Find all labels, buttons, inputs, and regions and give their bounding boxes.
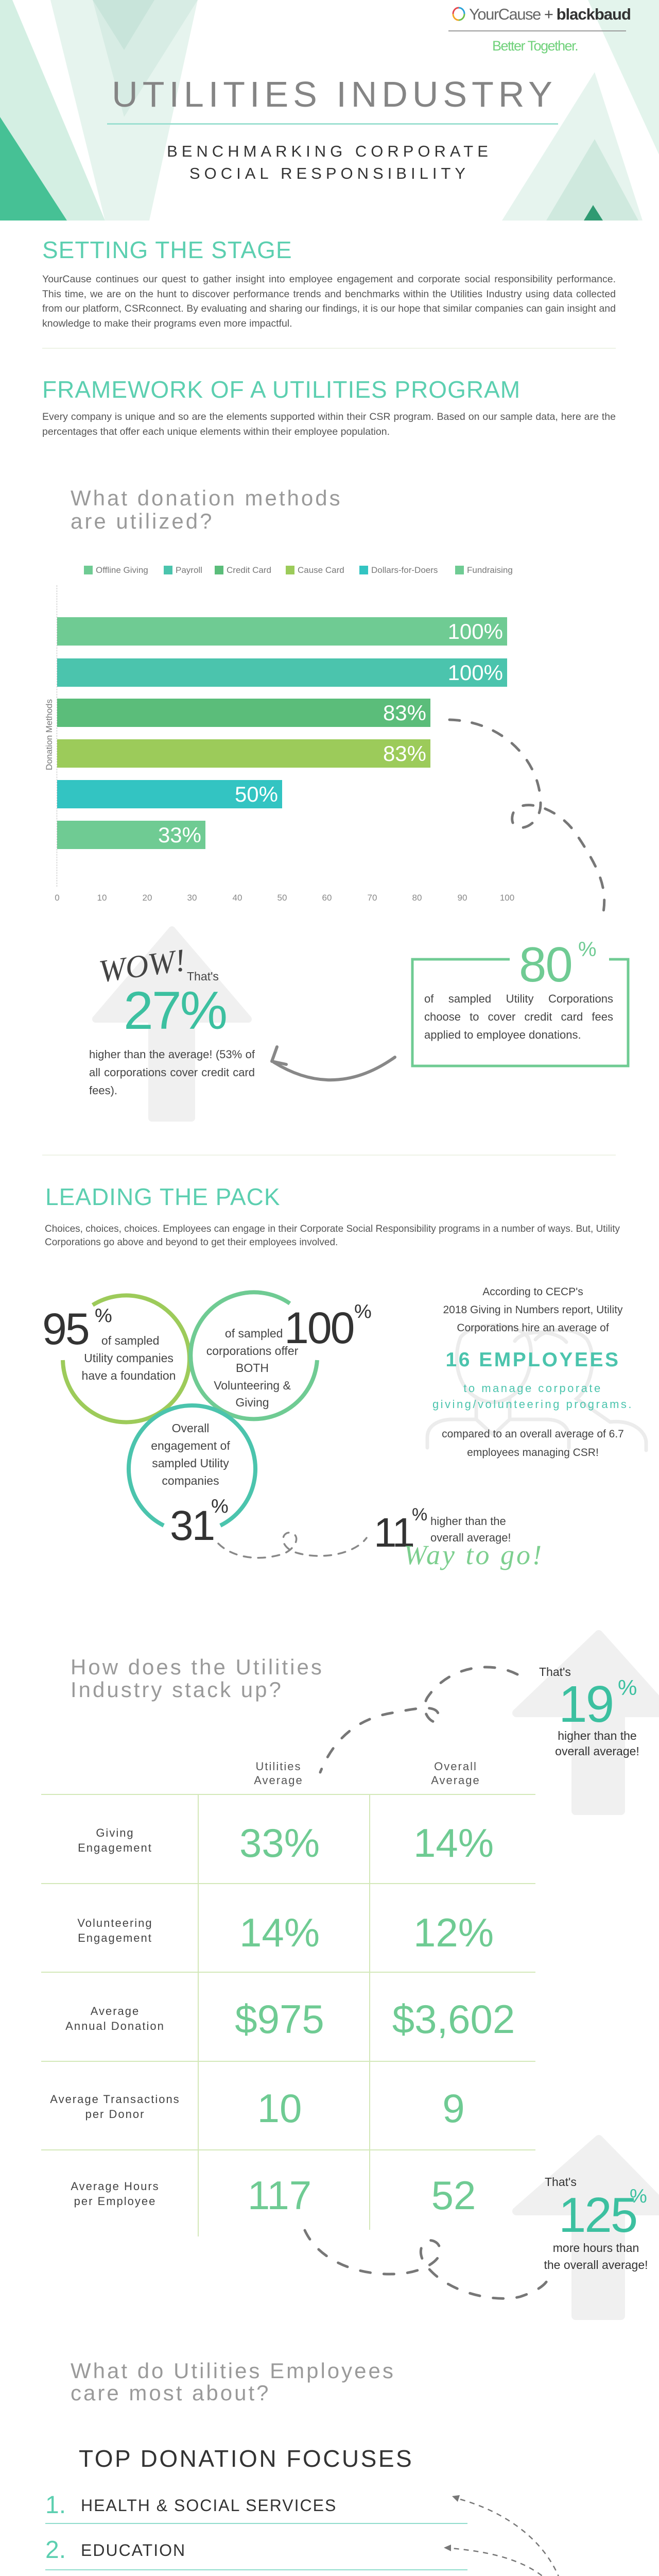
stat: 95% foundation bbox=[42, 1304, 176, 1382]
stat: 100% both: % bbox=[354, 1301, 372, 1323]
callout: 125% more hours: more hours than bbox=[553, 2241, 639, 2255]
table row: transactions per donor: per Donor bbox=[85, 2108, 145, 2121]
chart legend: Fundraising bbox=[467, 565, 513, 575]
stat: 100% both: BOTH bbox=[236, 1361, 269, 1375]
stat: 95% foundation: of sampled bbox=[101, 1334, 159, 1347]
callout box: 80% bbox=[411, 937, 629, 1067]
question: what do employees care about: care most about? bbox=[71, 2381, 271, 2405]
text: 33% bbox=[158, 823, 201, 847]
chart x axis labels: 0 bbox=[55, 893, 60, 903]
heading: setting the stage: SETTING THE STAGE bbox=[42, 236, 292, 263]
chart x axis labels: 80 bbox=[412, 893, 422, 903]
stat: 100% both: 100 bbox=[284, 1303, 353, 1353]
stat: 31% overall engagement: sampled Utility bbox=[152, 1456, 229, 1470]
callout: 125% more hours: the overall average! bbox=[544, 2258, 648, 2272]
chart x axis labels: 20 bbox=[143, 893, 152, 903]
chart legend: Cause Card bbox=[298, 565, 344, 575]
table row: transactions per donor: 10 bbox=[257, 2086, 302, 2131]
arrow: dashed loop to 19% bbox=[319, 1666, 519, 1773]
callout: WOW 27% bbox=[89, 943, 255, 1097]
stat: 100% both: Giving bbox=[235, 1396, 269, 1409]
logo: YourCause + blackbaud: YourCause + blackbaud bbox=[469, 5, 631, 23]
table row: volunteering engagement bbox=[77, 1910, 494, 1955]
table row: average annual donation: $975 bbox=[235, 1996, 324, 2042]
question: what do employees care about bbox=[71, 2359, 395, 2405]
stat: 95% foundation: 95 bbox=[42, 1304, 89, 1354]
chart: three overlapping circles bbox=[61, 1290, 319, 1528]
callout: WOW 27%: That's bbox=[187, 970, 219, 983]
chart x axis labels: 10 bbox=[97, 893, 107, 903]
arrows: dashed arrows from circle to items 1 and 2 bbox=[444, 2495, 559, 2576]
table row: hours per employee: 117 bbox=[248, 2173, 311, 2218]
chart legend: Credit Card bbox=[227, 565, 271, 575]
table row: giving engagement: Engagement bbox=[78, 1841, 152, 1854]
chart legend bbox=[84, 565, 513, 575]
list: top donation focuses bbox=[45, 2492, 467, 2570]
icon: gray up arrow 125% bbox=[512, 2135, 659, 2320]
logo: YourCause + blackbaud bbox=[448, 5, 631, 54]
text: CECP 16 employees: employees managing CSR! bbox=[467, 1447, 599, 1459]
table row: transactions per donor: 9 bbox=[442, 2086, 465, 2131]
text: 83% bbox=[383, 701, 426, 725]
callout: WOW 27%: higher than the average! (53% of all corporations cover credit card fees). bbox=[89, 1048, 255, 1097]
chart legend: Offline Giving bbox=[96, 565, 148, 575]
icon: people outline background bbox=[425, 1324, 648, 1452]
callout: WOW 27%: WOW! bbox=[97, 943, 188, 989]
stat: 100% both: of sampled bbox=[225, 1327, 283, 1340]
stat: 11% higher: overall average! bbox=[430, 1531, 511, 1544]
table row: average annual donation bbox=[65, 1996, 515, 2042]
stat: 31% overall engagement: companies bbox=[162, 1474, 219, 1487]
heading: framework: FRAMEWORK OF A UTILITIES PROGRAM bbox=[42, 376, 521, 403]
question: how does the industry stack up bbox=[71, 1655, 324, 1702]
question: how does the industry stack up: How does the Utilities bbox=[71, 1655, 324, 1679]
text: framework paragraph: Every company is unique and so are the elements supported within their CSR program. Based on our sample data, here are the percentages that offer each unique elements within their employee population. bbox=[42, 411, 616, 437]
list: top donation focuses: 2. bbox=[45, 2536, 66, 2564]
table: utilities vs overall bbox=[41, 1760, 535, 2236]
stat: 31% overall engagement bbox=[151, 1421, 230, 1549]
callout: 19% higher bbox=[539, 1665, 639, 1758]
text: CECP 16 employees: giving/volunteering programs. bbox=[432, 1398, 633, 1411]
subtitle: SOCIAL RESPONSIBILITY bbox=[189, 164, 470, 182]
stat: 11% higher: 11 bbox=[374, 1510, 413, 1555]
arrow: dashed loop to 125% bbox=[304, 2229, 548, 2300]
stat: 31% overall engagement: Overall bbox=[172, 1421, 209, 1435]
stat: 95% foundation: have a foundation bbox=[82, 1369, 176, 1382]
callout box: 80%: % bbox=[578, 938, 597, 961]
table: utilities vs overall: Utilities bbox=[256, 1760, 301, 1773]
table row: volunteering engagement: 12% bbox=[413, 1910, 494, 1955]
arrow: dashed loop from chart to 80% box bbox=[448, 718, 605, 912]
table row: hours per employee: 52 bbox=[431, 2173, 476, 2218]
question: donation methods: are utilized? bbox=[71, 509, 214, 533]
callout: 19% higher: That's bbox=[539, 1665, 571, 1679]
stat: 100% both: corporations offer bbox=[206, 1344, 298, 1357]
stat: 31% overall engagement: 31 bbox=[170, 1502, 214, 1549]
stat: 100% both: Volunteering & bbox=[214, 1379, 291, 1392]
chart x axis labels: 70 bbox=[368, 893, 377, 903]
chart x axis labels: 40 bbox=[233, 893, 242, 903]
text: CECP 16 employees: 16 EMPLOYEES bbox=[446, 1349, 620, 1371]
table row: average annual donation: Annual Donation bbox=[65, 2020, 165, 2032]
table row: giving engagement: 14% bbox=[413, 1820, 494, 1866]
arrow: dashed loop 31 to 11 bbox=[217, 1532, 368, 1559]
stat: 31% overall engagement: engagement of bbox=[151, 1439, 230, 1452]
table row: hours per employee: per Employee bbox=[74, 2195, 156, 2208]
callout: 19% higher: 19 bbox=[559, 1675, 613, 1733]
arrow: curved gray arrow pointing to WOW bbox=[270, 1045, 396, 1082]
chart x axis labels: 30 bbox=[187, 893, 197, 903]
chart x axis labels: 100 bbox=[500, 893, 514, 903]
text: intro paragraph: YourCause continues our quest to gather insight into employee engagement and corporate social responsibility performance. This time, we are on the hunt to discover performance trends and benchmarks within the Utilities Industry using data collected from our platform, CSRconnect. By evaluating and sharing our findings, it is our hope that similar companies can gain insight and knowledge to make their programs even more impactful. bbox=[42, 274, 616, 329]
table row: average annual donation: $3,602 bbox=[392, 1996, 515, 2042]
question: donation methods bbox=[71, 486, 342, 533]
stat: 100% both bbox=[206, 1301, 372, 1409]
question: what do employees care about: What do Utilities Employees bbox=[71, 2359, 395, 2383]
text: 100% bbox=[448, 660, 503, 685]
callout: 19% higher: overall average! bbox=[555, 1744, 639, 1758]
table row: volunteering engagement: Volunteering bbox=[77, 1917, 153, 1929]
stat: 11% higher: higher than the bbox=[430, 1515, 506, 1528]
table row: giving engagement: 33% bbox=[239, 1820, 320, 1866]
stat: 11% higher: % bbox=[412, 1505, 427, 1524]
icon: big gray up arrow (WOW) bbox=[92, 926, 252, 1122]
table row: volunteering engagement: Engagement bbox=[78, 1931, 152, 1944]
text: 83% bbox=[383, 741, 426, 766]
callout box: 80%: of sampled Utility Corporations choose to cover credit card fees applied to employee donations. bbox=[424, 992, 613, 1041]
table row: volunteering engagement: 14% bbox=[239, 1910, 320, 1955]
table: utilities vs overall: Average bbox=[431, 1774, 480, 1787]
callout: 125% more hours: % bbox=[630, 2185, 647, 2207]
table row: transactions per donor bbox=[50, 2086, 465, 2131]
chart x axis labels bbox=[55, 893, 514, 903]
icon: yourcause ring bbox=[452, 7, 465, 21]
bar chart: donation methods: Donation Methods bbox=[44, 699, 54, 770]
callout: 19% higher: higher than the bbox=[558, 1729, 637, 1742]
icon: gray up arrow 19% bbox=[512, 1630, 659, 1815]
table row: hours per employee bbox=[71, 2173, 476, 2218]
text: CECP 16 employees: Corporations hire an average of bbox=[457, 1322, 609, 1334]
chart legend: Dollars-for-Doers bbox=[371, 565, 438, 575]
header banner bbox=[0, 0, 659, 221]
text: CECP 16 employees: compared to an overall average of 6.7 bbox=[442, 1428, 624, 1440]
callout: WOW 27%: 27% bbox=[124, 981, 226, 1041]
table row: giving engagement: Giving bbox=[96, 1826, 134, 1839]
callout: 19% higher: % bbox=[618, 1675, 637, 1700]
text: CECP 16 employees: to manage corporate bbox=[463, 1382, 602, 1395]
table row: hours per employee: Average Hours bbox=[71, 2180, 160, 2193]
callout: 125% more hours: 125 bbox=[559, 2188, 636, 2243]
list: top donation focuses: HEALTH & SOCIAL SERVICES bbox=[81, 2496, 337, 2515]
chart x axis labels: 60 bbox=[322, 893, 332, 903]
subtitle: BENCHMARKING CORPORATE bbox=[167, 142, 492, 160]
logo: YourCause + blackbaud: Better Together. bbox=[492, 38, 578, 54]
subtitle bbox=[167, 142, 492, 182]
table row: average annual donation: Average bbox=[91, 2005, 140, 2018]
stat: 31% overall engagement: % bbox=[211, 1496, 229, 1517]
heading: leading the pack: LEADING THE PACK bbox=[45, 1183, 281, 1210]
text: CECP 16 employees bbox=[432, 1286, 633, 1459]
callout: 125% more hours bbox=[544, 2175, 648, 2272]
question: donation methods: What donation methods bbox=[71, 486, 342, 510]
table row: giving engagement bbox=[78, 1820, 494, 1866]
chart legend: Payroll bbox=[176, 565, 202, 575]
text: 50% bbox=[235, 782, 278, 806]
list: top donation focuses: EDUCATION bbox=[81, 2541, 186, 2560]
text: CECP 16 employees: 2018 Giving in Numbers report, Utility bbox=[443, 1304, 622, 1316]
chart x axis labels: 50 bbox=[278, 893, 287, 903]
text: way to go: Way to go! bbox=[404, 1539, 544, 1570]
chart x axis labels: 90 bbox=[458, 893, 467, 903]
table: utilities vs overall: Average bbox=[254, 1774, 303, 1787]
title: UTILITIES INDUSTRY bbox=[112, 74, 557, 114]
question: how does the industry stack up: Industry stack up? bbox=[71, 1677, 283, 1702]
table: utilities vs overall: Overall bbox=[434, 1760, 477, 1773]
callout box: 80%: 80 bbox=[519, 937, 572, 992]
list: top donation focuses: 1. bbox=[45, 2492, 66, 2519]
heading: top donation focuses: TOP DONATION FOCUSES bbox=[79, 2445, 413, 2472]
text: CECP 16 employees: According to CECP's bbox=[482, 1286, 583, 1298]
stat: 95% foundation: % bbox=[95, 1305, 112, 1327]
text: 100% bbox=[448, 619, 503, 643]
callout: 125% more hours: That's bbox=[545, 2175, 577, 2189]
table row: transactions per donor: Average Transactions bbox=[50, 2093, 180, 2106]
stat: 11% higher bbox=[374, 1505, 544, 1570]
text: leading paragraph: Choices, choices, choices. Employees can engage in their Corporate Social Responsibility programs in a number of ways. But, Utility Corporations go above and beyond to get their employees involved. bbox=[45, 1224, 620, 1248]
stat: 95% foundation: Utility companies bbox=[84, 1351, 174, 1365]
